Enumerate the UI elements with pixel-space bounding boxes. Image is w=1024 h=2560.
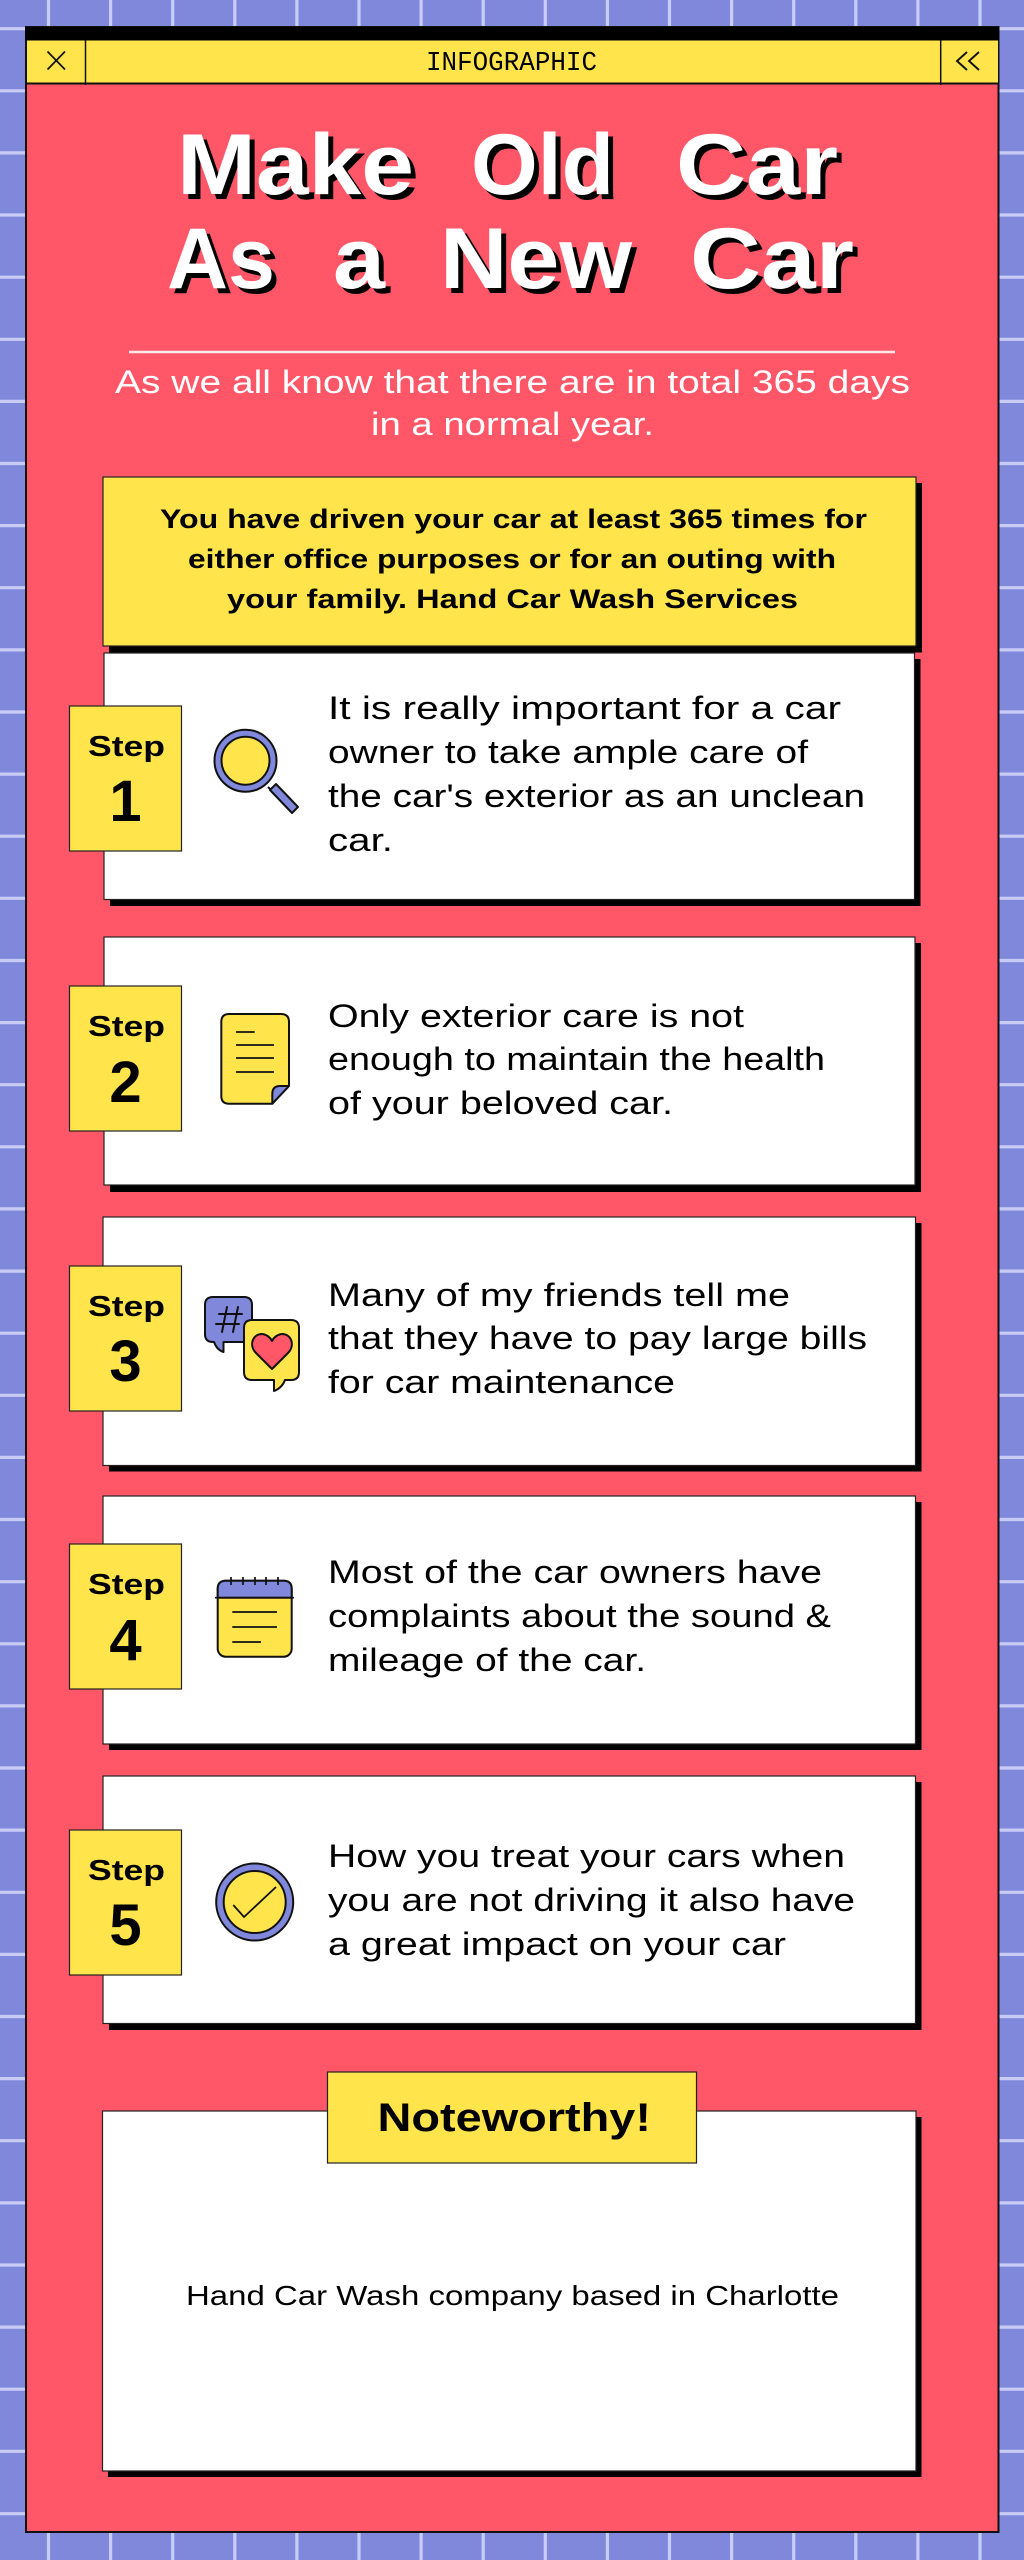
step 5 text xyxy=(328,1838,855,1962)
title shadow: New xyxy=(445,216,638,312)
title white text: Make xyxy=(177,117,414,213)
step 1 badge: Step xyxy=(88,731,165,763)
icon: check mark circle xyxy=(216,1864,293,1940)
intro callout xyxy=(103,477,922,652)
noteworthy heading: Noteworthy! xyxy=(378,2096,651,2140)
panel: step 3 xyxy=(70,1217,922,1472)
header label: INFOGRAPHIC xyxy=(426,49,597,79)
title white text: As xyxy=(167,211,275,307)
step 4 text: Most of the car owners have xyxy=(328,1554,822,1590)
step 4 text xyxy=(328,1554,831,1678)
title xyxy=(167,117,859,312)
panel: step 4 xyxy=(70,1496,922,1750)
subtitle xyxy=(115,364,910,442)
title shadow: Car xyxy=(695,216,859,312)
noteworthy heading xyxy=(328,2072,696,2163)
step 2 badge xyxy=(70,986,182,1131)
title white text: Old xyxy=(471,117,614,213)
intro callout: either office purposes or for an outing with xyxy=(188,544,836,574)
step 1 badge xyxy=(70,706,182,851)
step 5 text: How you treat your cars when xyxy=(328,1838,845,1874)
step 1 text: the car's exterior as an unclean xyxy=(328,778,865,814)
panel: step 5 xyxy=(70,1776,922,2030)
step 3 text: for car maintenance xyxy=(328,1364,675,1400)
panel: step 2 xyxy=(70,937,921,1192)
step 3 badge: Step xyxy=(88,1291,165,1323)
step 2 badge: Step xyxy=(88,1011,165,1043)
step 3 text: that they have to pay large bills xyxy=(328,1320,867,1356)
title white text: Car xyxy=(690,211,854,307)
step 4 badge: 4 xyxy=(109,1608,142,1673)
step 1 text xyxy=(328,690,865,858)
step 3 text xyxy=(328,1277,867,1400)
step 4 text: complaints about the sound & xyxy=(328,1598,831,1634)
title shadow: a xyxy=(338,216,391,312)
panel: noteworthy xyxy=(102,2072,922,2477)
step 3 badge: 3 xyxy=(109,1329,142,1394)
step 3 text: Many of my friends tell me xyxy=(328,1277,790,1313)
step 2 text: enough to maintain the health xyxy=(328,1041,825,1077)
step 5 text: a great impact on your car xyxy=(328,1926,786,1962)
step 5 badge xyxy=(70,1830,182,1975)
icon: close X xyxy=(48,52,65,70)
panel: step 1 xyxy=(70,653,920,906)
step 2 text: Only exterior care is not xyxy=(328,998,744,1034)
step 2 badge: 2 xyxy=(109,1050,142,1115)
icon: chat bubbles xyxy=(205,1297,299,1391)
icon: magnifying glass xyxy=(214,730,298,813)
step 1 text: owner to take ample care of xyxy=(328,734,808,770)
title shadow: Car xyxy=(681,122,843,218)
step 5 badge: Step xyxy=(88,1855,165,1887)
subtitle: in a normal year. xyxy=(371,406,654,442)
window header bar xyxy=(27,40,998,85)
step 5 text: you are not driving it also have xyxy=(328,1882,855,1918)
step 4 badge xyxy=(70,1544,182,1689)
step 4 badge: Step xyxy=(88,1569,165,1601)
title shadow: Make xyxy=(182,122,419,218)
noteworthy text: Hand Car Wash company based in Charlotte xyxy=(186,2280,839,2311)
title shadow xyxy=(172,122,859,312)
step 1 text: car. xyxy=(328,822,393,858)
intro callout: You have driven your car at least 365 times for xyxy=(160,504,868,534)
icon: document xyxy=(221,1014,289,1104)
step 1 badge: 1 xyxy=(109,769,142,834)
step 4 text: mileage of the car. xyxy=(328,1642,646,1678)
step 1 text: It is really important for a car xyxy=(328,690,841,726)
title shadow: Old xyxy=(476,122,619,218)
title white text xyxy=(167,117,854,307)
icon: double chevron xyxy=(957,52,979,70)
title white text: a xyxy=(333,211,386,307)
intro callout: your family. Hand Car Wash Services xyxy=(227,584,798,614)
step 2 text: of your beloved car. xyxy=(328,1085,673,1121)
title white text: New xyxy=(440,211,633,307)
title shadow: As xyxy=(172,216,280,312)
subtitle: As we all know that there are in total 365 days xyxy=(115,364,910,400)
title white text: Car xyxy=(676,117,838,213)
step 3 badge xyxy=(70,1266,182,1411)
step 5 badge: 5 xyxy=(109,1893,142,1958)
step 2 text xyxy=(328,998,825,1121)
icon: notepad xyxy=(215,1577,294,1657)
